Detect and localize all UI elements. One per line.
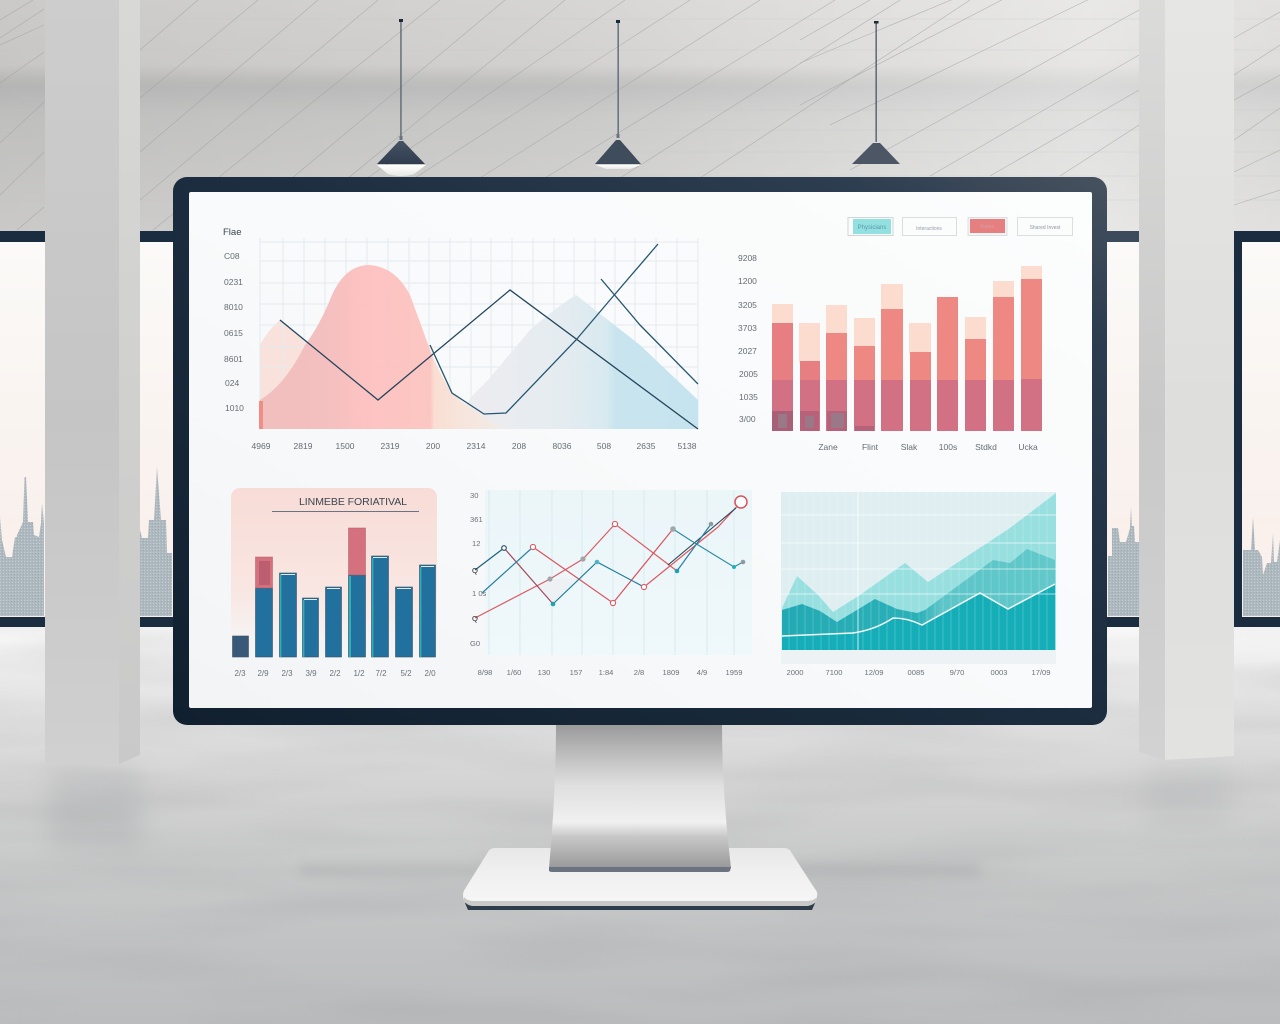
x axis labels: 1/2 [353,669,365,678]
data markers [502,496,747,606]
salmon bar middles [772,279,1042,383]
monitor bezel [173,177,1107,725]
x axis labels: 3/9 [305,669,317,678]
legend button teal: Physicians [858,225,886,231]
window frames [0,231,1280,627]
x axis labels [252,441,697,451]
pendant lamp 1 [377,19,426,176]
legend button outline [902,218,956,236]
red line two [533,529,673,603]
deep teal area [782,584,1055,650]
x axis labels: Flint [862,442,879,452]
monitor screen [189,192,1092,708]
bars [232,556,436,657]
x axis labels: Slak [901,442,918,452]
y axis labels [470,491,487,648]
x axis labels: 12/09 [864,668,884,677]
y axis labels: 1 0s [472,589,487,598]
chart heading: Flae [223,227,241,238]
x axis labels: 7100 [826,668,842,677]
legend button outline right [1018,218,1072,236]
y axis labels: 2005 [739,369,758,379]
skyline left [0,467,172,616]
y axis labels: Q [472,566,478,575]
right pillar [1139,0,1234,760]
stand neck [549,725,731,872]
ceiling [0,0,1280,232]
legend button teal [848,218,893,236]
windows with skyline [0,242,1280,617]
x axis labels: 2635 [637,441,656,451]
x axis labels: 1/60 [507,668,521,677]
teal line left [482,547,533,593]
y axis labels: Q [472,614,478,623]
y axis labels [224,251,244,413]
y axis labels: 3703 [738,323,757,333]
dark line series [280,290,698,429]
x axis labels [478,668,742,677]
stacked bar chart [738,253,1042,452]
grid [260,238,698,429]
x axis labels: 1959 [726,668,742,677]
x axis labels: 8/98 [478,668,492,677]
y axis labels: 2027 [738,346,757,356]
y axis labels: C08 [224,251,240,261]
x axis labels: 208 [512,441,526,451]
y axis labels: 024 [225,378,239,388]
blue line series [430,244,658,414]
x axis labels: 157 [570,668,582,677]
y axis labels: 30 [470,491,478,500]
x axis labels: 2819 [294,441,313,451]
x axis labels: Stdkd [975,442,997,452]
floor [0,627,1280,1024]
bar top caps [281,557,434,600]
x axis labels: 100s [939,442,957,452]
top left area and line chart [223,227,698,451]
red bar segments [256,528,366,588]
x axis labels: 8036 [553,441,572,451]
y axis labels: 0615 [224,328,243,338]
x axis labels: 0085 [908,668,924,677]
x axis labels: 1809 [663,668,679,677]
legend button red: Status [980,224,995,230]
rose bar bases [772,379,1042,431]
bar chart panel [231,488,437,678]
y axis labels: 361 [470,515,483,524]
y axis labels: 3205 [738,300,757,310]
y axis labels: 0231 [224,277,243,287]
middle teal area [782,549,1055,650]
x axis labels: 5138 [678,441,697,451]
y axis labels: 3/00 [739,414,756,424]
second blue line [601,279,698,384]
left pillar [45,0,140,764]
dark line [475,548,504,570]
x axis labels: 508 [597,441,611,451]
y axis labels: 8601 [224,354,243,364]
x axis labels: 0003 [991,668,1007,677]
teal bar edges [280,558,421,657]
x axis labels: 200 [426,441,440,451]
panel background [231,488,437,658]
x axis labels: 7/2 [375,669,387,678]
x axis labels: 2/9 [257,669,269,678]
x axis labels: 17/09 [1031,668,1051,677]
plot background [781,492,1056,664]
x axis labels: 1:84 [599,668,613,677]
panel title: LINMEBE FORIATIVAL [299,496,407,508]
pendant lamp 3 [852,21,900,164]
red line one [475,524,677,618]
x axis labels: Zane [818,442,838,452]
x axis labels [818,442,1038,452]
x axis labels: 1500 [336,441,355,451]
white trend line [782,584,1055,636]
multi-line chart [470,490,752,677]
x axis labels [787,668,1051,677]
x axis labels: 2/3 [234,669,246,678]
x axis labels: 5/2 [400,669,412,678]
top right legend buttons [848,218,1072,236]
monitor stand [463,725,817,910]
stand base [463,848,817,910]
x axis labels: 2/2 [329,669,341,678]
light bar tops [772,266,1042,363]
blue segment [677,524,711,571]
dark red segment [504,548,553,604]
x axis labels: 4969 [252,441,271,451]
x axis labels [234,669,436,678]
y axis labels: 1200 [738,276,757,286]
legend button outline: Interactions [916,226,942,232]
legend button red [968,218,1007,236]
x axis labels: 2319 [381,441,400,451]
y axis labels: 9208 [738,253,757,263]
x axis labels: 4/9 [697,668,707,677]
x axis labels: 9/70 [950,668,964,677]
x axis labels: 2/0 [424,669,436,678]
skyline right [1108,507,1280,616]
x axis labels: 2/8 [634,668,644,677]
peach back area [260,320,315,429]
pink bell area [260,265,505,429]
teal wave [553,562,644,604]
legend button outline right: Shared Invest [1030,225,1061,231]
red line rising [644,502,741,587]
y axis labels: 12 [472,539,480,548]
teal line right [673,529,743,567]
y axis labels [738,253,758,424]
chart gridlines [781,492,1056,650]
x axis labels: 2/3 [281,669,293,678]
dark rising line [668,508,736,565]
x axis labels: 2000 [787,668,803,677]
dark bar feet [772,411,874,431]
x axis labels: 2314 [467,441,486,451]
y axis labels: G0 [470,639,480,648]
x axis labels: 130 [538,668,550,677]
y axis labels: 1010 [225,403,244,413]
x axis labels: Ucka [1018,442,1038,452]
light teal area [782,493,1056,650]
chart background [485,490,752,655]
y axis labels: 1035 [739,392,758,402]
blue area [455,295,698,429]
y axis labels: 8010 [224,302,243,312]
pendant lamp 2 [595,20,641,169]
teal area chart [781,492,1056,677]
